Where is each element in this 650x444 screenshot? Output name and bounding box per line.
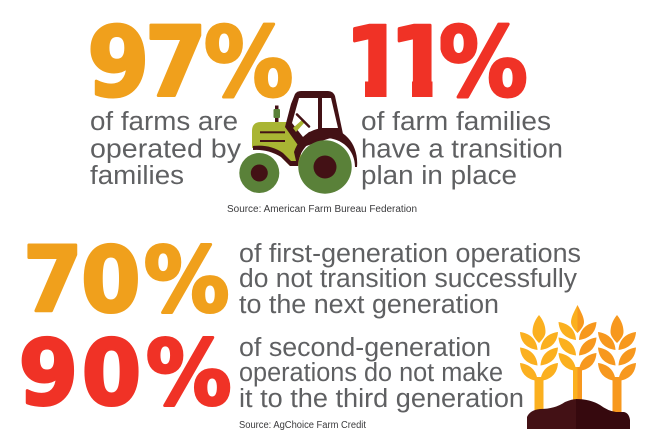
text: of farms are operated by families: of farms are — [90, 108, 238, 136]
soil mound — [527, 399, 577, 429]
source: American Farm Bureau Federation: Source: American Farm Bureau Federation — [227, 204, 417, 215]
text: first-generation operations: to the next generation — [239, 291, 499, 319]
text: first-generation operations — [239, 240, 581, 319]
wheat: center ear — [558, 305, 596, 407]
wheat: right ear — [598, 315, 636, 427]
stat: 90%: 90% — [19, 321, 232, 426]
text: second-generation operations: operations do not make — [239, 359, 503, 387]
text: first-generation operations: of first-generation operations — [239, 240, 581, 268]
text: of farm families have a transition plan in place: of farm families — [361, 108, 551, 136]
text: of farms are operated by families: families — [90, 162, 184, 190]
stat: 70%: 70% — [23, 228, 229, 333]
text: of farms are operated by families: operated by — [90, 136, 241, 164]
stat: 11%: 11% — [344, 6, 528, 118]
text: of farm families have a transition plan in place — [361, 108, 563, 190]
text: second-generation operations — [239, 334, 524, 413]
text: second-generation operations: it to the third generation — [239, 385, 524, 413]
icon: tractor — [239, 91, 357, 194]
text: second-generation operations: of second-generation — [239, 334, 491, 362]
text: of farm families have a transition plan in place: have a transition — [361, 136, 563, 164]
text: of farms are operated by families — [90, 108, 241, 190]
text: of farm families have a transition plan in place: plan in place — [361, 162, 517, 190]
stat: 97%: 97% — [87, 6, 293, 118]
icon: wheat and soil — [520, 305, 636, 429]
text: first-generation operations: do not transition successfully — [239, 265, 577, 293]
source: AgChoice Farm Credit: Source: AgChoice Farm Credit — [239, 420, 366, 431]
wheat: left ear — [520, 315, 558, 427]
